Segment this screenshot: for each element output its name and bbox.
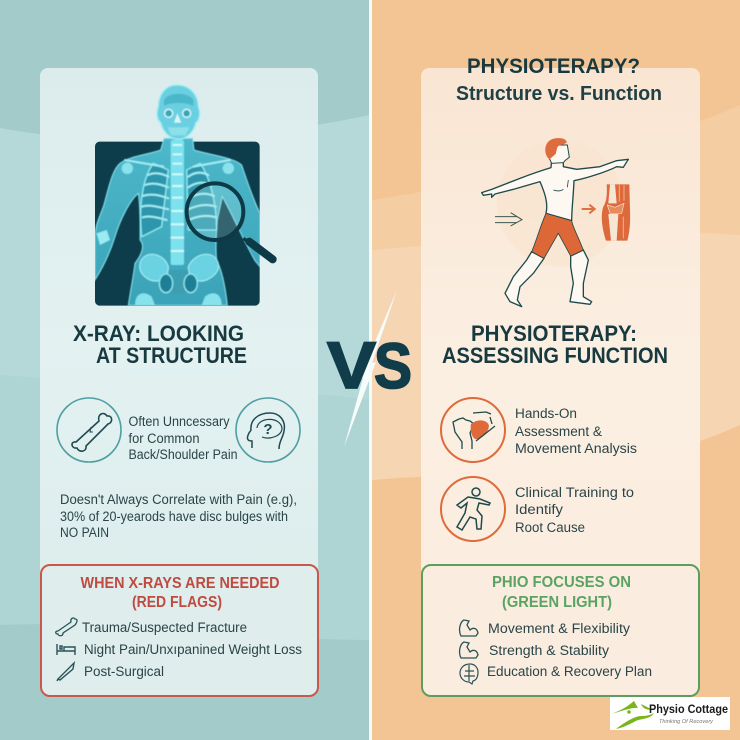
heading: x-ray: AT STRUCTURE — [96, 343, 247, 368]
red flags heading: (RED FLAGS) — [132, 594, 222, 611]
heading: x-ray — [73, 321, 247, 368]
red flags heading: WHEN X-RAYS ARE NEEDED — [80, 575, 280, 592]
text: clinical training: Identify — [515, 502, 563, 517]
center divider — [369, 0, 372, 740]
text: hands-on assessment — [515, 406, 637, 456]
title — [456, 55, 662, 105]
text: hands-on assessment: Movement Analysis — [515, 441, 637, 456]
icon: bone — [57, 398, 121, 462]
icon: bed — [57, 644, 75, 655]
item: strength: Strength & Stability — [489, 643, 609, 658]
VS lightning slash — [344, 290, 397, 447]
text: clinical training — [515, 485, 634, 535]
text: correlation note: NO PAIN — [60, 525, 109, 540]
green light heading — [492, 574, 631, 611]
text: clinical training: Clinical Training to — [515, 485, 634, 500]
logo: Physio Cottage: Physio Cottage — [649, 704, 728, 716]
icon: fractured bone — [56, 618, 77, 636]
text: often unnecessary: Back/Shoulder Pain — [128, 447, 238, 462]
title: PHYSIOTERAPY? — [467, 55, 640, 78]
text: often unnecessary: for Common — [128, 431, 200, 446]
green light heading: (GREEN LIGHT) — [502, 594, 612, 611]
right background — [370, 0, 740, 740]
icon: flexed arm — [460, 620, 478, 636]
heading: physiotherapy: ASSESSING FUNCTION — [442, 343, 668, 368]
illustration: person in lunge with arms out and knee anatomy — [482, 138, 630, 307]
item: education: Education & Recovery Plan — [487, 664, 652, 679]
text: clinical training: Root Cause — [515, 520, 585, 535]
logo: Physio Cottage: Thinking Of Recovery — [659, 719, 714, 725]
text: hands-on assessment: Hands-On — [515, 406, 577, 421]
panel: x-ray — [40, 68, 318, 628]
x-ray image of skeleton with magnifier — [95, 85, 273, 306]
VS badge — [327, 328, 412, 402]
heading: x-ray: X-RAY: LOOKING — [73, 321, 244, 346]
heading: physiotherapy: PHYSIOTERAPY: — [471, 321, 637, 346]
icon: brain — [460, 664, 478, 684]
item: post-surgical: Post-Surgical — [84, 664, 164, 679]
panel: red flags — [41, 565, 318, 696]
panel: physiotherapy — [421, 68, 700, 628]
green light heading: PHIO FOCUSES ON — [492, 574, 631, 591]
VS badge: V — [327, 328, 376, 402]
text: correlation note — [60, 492, 297, 540]
text: hands-on assessment: Assessment & — [515, 424, 602, 439]
text: correlation note: 30% of 20-yearods have disc bulges with — [60, 509, 288, 524]
item: night pain: Night Pain/Unxıpanined Weight Loss — [84, 642, 302, 657]
logo: Physio Cottage — [610, 697, 730, 730]
red flags heading — [80, 575, 280, 611]
panel: green light — [422, 565, 699, 696]
VS badge: S — [374, 330, 412, 402]
heading: physiotherapy — [442, 321, 668, 368]
icon: strength arm — [460, 642, 478, 658]
text: often unnecessary — [128, 414, 238, 462]
left background — [0, 0, 370, 740]
item: movement: Movement & Flexibility — [488, 621, 630, 636]
icon: head with question mark: ? — [263, 421, 273, 438]
icon: hands-on — [441, 398, 505, 462]
text: often unnecessary: Often Unncessary — [128, 414, 230, 429]
text: correlation note: Doesn't Always Correlate with Pain (e.g), — [60, 492, 297, 507]
icon: head with question mark — [236, 398, 300, 462]
title: Structure vs. Function — [456, 83, 662, 105]
item: trauma: Trauma/Suspected Fracture — [82, 620, 247, 635]
icon: scalpel — [57, 663, 74, 681]
icon: runner — [441, 477, 505, 541]
